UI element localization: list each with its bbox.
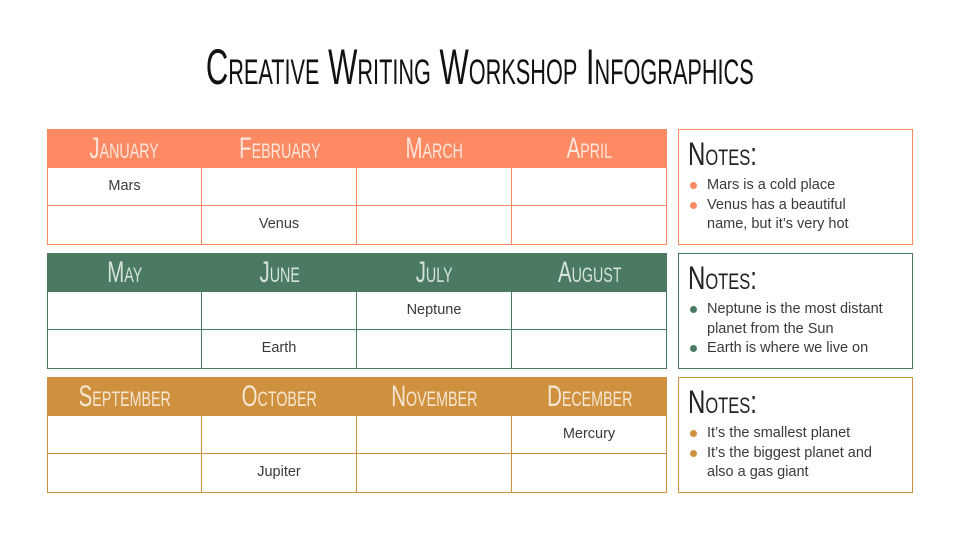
header row bbox=[47, 129, 667, 167]
notes list: Neptune is the most distant planet from the Sun bbox=[707, 301, 883, 336]
grid: Mercury bbox=[563, 426, 615, 442]
grid: Jupiter bbox=[257, 464, 301, 480]
header row: August bbox=[558, 256, 621, 289]
header row: May bbox=[107, 256, 142, 289]
header row: July bbox=[416, 256, 453, 289]
notes list bbox=[690, 301, 883, 356]
header row: March bbox=[406, 132, 463, 165]
table: may-august bbox=[47, 253, 667, 369]
header row: September bbox=[78, 380, 171, 413]
notes list: Earth is where we live on bbox=[707, 340, 868, 356]
notes list: It’s the biggest planet and also a gas giant bbox=[707, 444, 872, 480]
notes: panel 2 bbox=[678, 253, 913, 369]
header row: June bbox=[259, 256, 300, 289]
notes heading: Notes: bbox=[688, 260, 757, 296]
grid: Mars bbox=[108, 178, 141, 194]
notes: panel 1 bbox=[678, 129, 913, 245]
notes list: Mars is a cold place bbox=[707, 177, 835, 193]
table: january-april bbox=[47, 129, 667, 245]
header row: April bbox=[567, 132, 612, 165]
header row bbox=[47, 253, 667, 291]
title: Creative Writing Workshop Infographics bbox=[206, 39, 754, 95]
header row: February bbox=[239, 132, 320, 165]
notes list: It’s the smallest planet bbox=[707, 425, 850, 441]
grid bbox=[47, 415, 667, 493]
notes heading: Notes: bbox=[688, 384, 757, 420]
notes list: Venus has a beautiful name, but it’s very hot bbox=[707, 196, 849, 232]
table: september-december bbox=[47, 377, 667, 493]
header row bbox=[47, 377, 667, 415]
header row: December bbox=[547, 380, 632, 413]
notes heading: Notes: bbox=[688, 136, 757, 172]
header row: January bbox=[90, 132, 159, 165]
notes: panel 3 bbox=[678, 377, 913, 493]
grid: Venus bbox=[259, 216, 299, 232]
grid: Earth bbox=[262, 340, 296, 356]
grid bbox=[47, 167, 667, 245]
notes list bbox=[690, 425, 872, 480]
header row: November bbox=[391, 380, 478, 413]
grid bbox=[47, 291, 667, 369]
notes list bbox=[690, 177, 849, 232]
grid: Neptune bbox=[407, 302, 461, 318]
header row: October bbox=[242, 380, 317, 413]
